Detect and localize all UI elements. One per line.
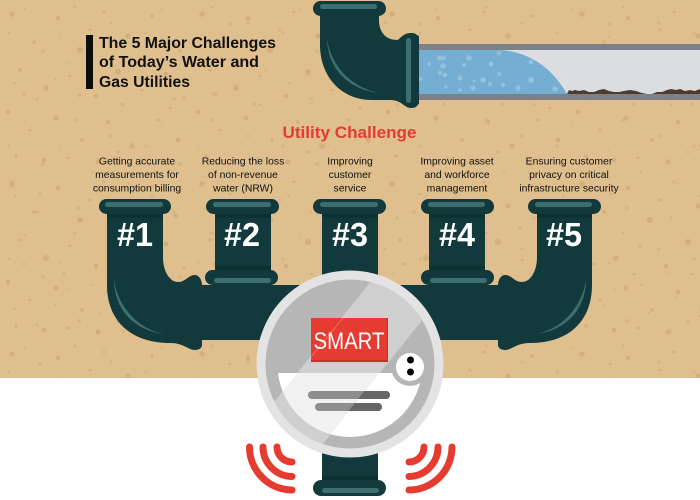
pipe 5 elbow [498,199,601,350]
manifold pipe network [99,199,601,350]
challenge 1 text: Getting accurate [99,156,175,168]
title: of Today’s Water and [99,54,259,71]
SMART label [311,318,388,362]
water in pipe [419,50,567,94]
meter display panel [278,373,422,437]
challenge 5 text: infrastructure security [519,184,619,194]
main horizontal pipe [190,285,510,340]
pipe 1 elbow: #1 [117,216,153,253]
challenge 1 text: consumption billing [93,184,181,194]
challenge 5 text: Ensuring customer [526,156,613,168]
SMART label: SMART [314,328,385,355]
challenge 3 text: Improving [327,156,373,168]
bottom outlet pipe [313,445,386,496]
title [86,35,276,91]
top pipe with water and sediment [313,1,700,108]
sediment [567,89,700,94]
heading: Utility Challenge: Utility Challenge [282,124,416,142]
challenge 4 text: Improving asset [420,156,494,168]
signal waves right [409,447,452,490]
challenge 2 text: Reducing the loss [202,156,284,168]
smart meter [256,270,444,458]
pipe 3 [313,199,386,290]
pipe 5 elbow: #5 [546,216,582,253]
challenge 3 text: service [334,184,367,194]
pipe 4 [421,199,494,285]
challenge 3 text: customer [329,170,372,181]
challenge 2 text: water (NRW) [212,184,273,194]
pipe 1 elbow [99,199,202,350]
challenge 4 text: management [427,184,487,194]
signal waves left [249,447,292,490]
elbow pipe [320,14,419,108]
pipe 4: #4 [439,216,476,253]
title: The 5 Major Challenges [99,35,276,52]
title: Gas Utilities [99,74,190,91]
meter dial [391,348,429,386]
challenge 4 text: and workforce [424,170,490,181]
status bars [308,391,390,411]
pipe 3: #3 [332,216,368,253]
pipe 2: #2 [224,216,260,253]
challenge 2 text: of non-revenue [208,170,278,181]
challenge 5 text: privacy on critical [529,170,609,181]
soil background [0,0,700,378]
pipe 2 [205,199,279,285]
challenge 1 text: measurements for [95,170,179,181]
glass glare [274,282,422,444]
